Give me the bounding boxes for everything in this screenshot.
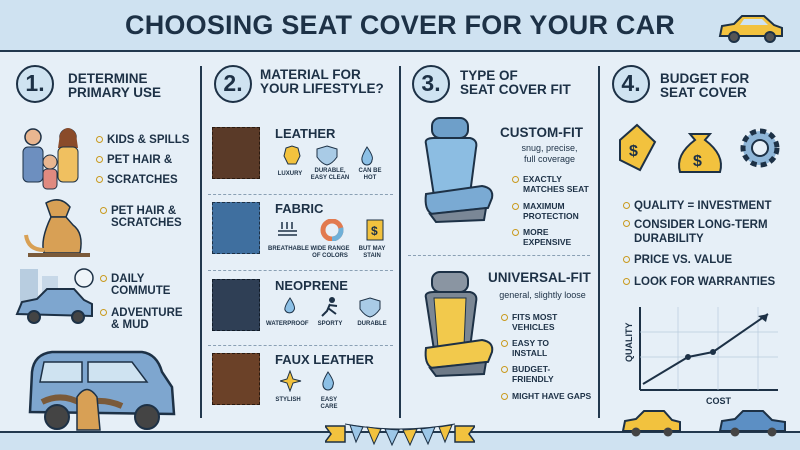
panel: 3 fit: FITS MOST (512, 312, 557, 322)
chart: quality vs cost: QUALITY (624, 322, 634, 362)
panel: 1 primary use: COMMUTE (111, 285, 170, 297)
material: faux leather: STYLISH (275, 397, 301, 403)
icons: cars at bottom (622, 410, 786, 436)
icons: tag, money bag, gear: $ (693, 153, 702, 170)
panel: 3 fit: MAXIMUM (523, 201, 565, 211)
panel: 3 fit: VEHICLES (512, 322, 555, 332)
material: leather: LUXURY (278, 171, 302, 177)
material: neoprene (212, 278, 387, 331)
material: faux leather (212, 352, 374, 410)
panel: 3 fit: TYPE OF (460, 68, 518, 83)
panel: 4 budget: BUDGET FOR (660, 71, 749, 86)
material: leather: LEATHER (275, 126, 335, 141)
panel: 1 primary use: SCRATCHES (107, 174, 178, 186)
material: leather: CAN BE (358, 168, 382, 174)
icon: dog (24, 199, 90, 257)
panel: 3 fit: CUSTOM-FIT (500, 125, 583, 140)
material: fabric: $ (371, 224, 378, 238)
panel: 4 budget (612, 65, 786, 436)
panel: 4 budget: SEAT COVER (660, 85, 747, 100)
heading 4 (612, 65, 650, 103)
panel: 4 budget: DURABILITY (634, 233, 704, 245)
panel: 1 primary use: DETERMINE (68, 71, 148, 86)
panel: 1 primary use: & MUD (111, 319, 149, 331)
panel: 1 primary use (16, 65, 189, 431)
icon: suv with dog (28, 350, 176, 431)
panel: 3 fit: UNIVERSAL-FIT (488, 270, 591, 285)
panel: 3 fit: full coverage (524, 154, 575, 164)
material: fabric: STAIN (363, 253, 381, 259)
material: leather (212, 126, 382, 181)
icon: title car (718, 15, 783, 43)
icon: family (22, 128, 78, 190)
material: fabric: WIDE RANGE (310, 246, 350, 252)
panel: 1 primary use: DAILY (111, 273, 144, 285)
heading 1: 1. (25, 70, 45, 96)
panel: 1 primary use: PET HAIR & (111, 205, 176, 217)
panel: 2 material: MATERIAL FOR (260, 67, 361, 82)
icon: city car (16, 268, 94, 324)
material: fabric: BREATHABLE (268, 246, 309, 252)
material: neoprene: DURABLE (357, 321, 387, 327)
panel: 3 fit: PROTECTION (523, 211, 579, 221)
panel: 4 budget: PRICE VS. VALUE (634, 254, 732, 266)
material: leather: EASY CLEAN (311, 175, 349, 181)
heading 2: 2. (223, 70, 243, 96)
panel: 3 fit: SEAT COVER FIT (460, 82, 571, 97)
chart: quality vs cost: COST (706, 396, 732, 406)
heading 3: 3. (421, 70, 441, 96)
panel: 1 primary use: SCRATCHES (111, 217, 182, 229)
material: leather: HOT (364, 175, 376, 181)
material: fabric: OF COLORS (312, 253, 348, 259)
material: faux leather: EASY CARE (320, 397, 338, 410)
material: neoprene: SPORTY (318, 321, 342, 327)
material: neoprene: WATERPROOF (266, 321, 309, 327)
icon: custom seat (424, 117, 494, 223)
panel: 3 fit: EXPENSIVE (523, 237, 571, 247)
material: neoprene: NEOPRENE (275, 278, 348, 293)
icon: universal seat (424, 271, 494, 377)
panel: 3 fit (408, 65, 591, 401)
panel: 4 budget: CONSIDER LONG-TERM (634, 219, 768, 231)
panel: 4 budget: QUALITY = INVESTMENT (634, 200, 771, 212)
panel: 3 fit: BUDGET- (512, 364, 550, 374)
panel: 1 primary use: PRIMARY USE (68, 85, 161, 100)
panel: 3 fit: EASY TO (512, 338, 549, 348)
heading 4: 4. (621, 70, 641, 96)
panel: 3 fit: FRIENDLY (512, 374, 554, 384)
panel: 3 fit: EXACTLY (523, 174, 562, 184)
panel: 3 fit: INSTALL (512, 348, 547, 358)
material: faux leather: FAUX LEATHER (275, 352, 374, 367)
material: fabric: BUT MAY (359, 246, 385, 252)
panel: 3 fit: MIGHT HAVE GAPS (512, 391, 591, 401)
material: fabric: FABRIC (275, 201, 323, 216)
panel: 3 fit: MATCHES SEAT (523, 184, 589, 194)
icons: tag, money bag, gear (619, 124, 780, 173)
panel: 1 primary use: PET HAIR & (107, 154, 172, 166)
title: CHOOSING SEAT COVER FOR YOUR CAR (125, 10, 675, 40)
heading 2 (214, 65, 252, 103)
heading 3 (412, 65, 450, 103)
panel: 3 fit: general, slightly loose (499, 290, 586, 300)
panel: 2 material: YOUR LIFESTYLE? (260, 81, 384, 96)
panel: 1 primary use: KIDS & SPILLS (107, 134, 189, 146)
material: fabric (212, 201, 386, 259)
material: leather: DURABLE, (314, 168, 346, 174)
panel: 3 fit: snug, precise, (521, 143, 578, 153)
title bar (0, 0, 800, 52)
panel: 2 material (208, 65, 393, 410)
panel: 1 primary use: ADVENTURE (111, 307, 183, 319)
panel: 4 budget: LOOK FOR WARRANTIES (634, 276, 775, 288)
icons: tag, money bag, gear: $ (629, 143, 638, 160)
banner: bunting (325, 424, 475, 446)
panel: 3 fit: MORE (523, 227, 548, 237)
chart: quality vs cost (624, 307, 778, 406)
heading 1 (16, 65, 54, 103)
